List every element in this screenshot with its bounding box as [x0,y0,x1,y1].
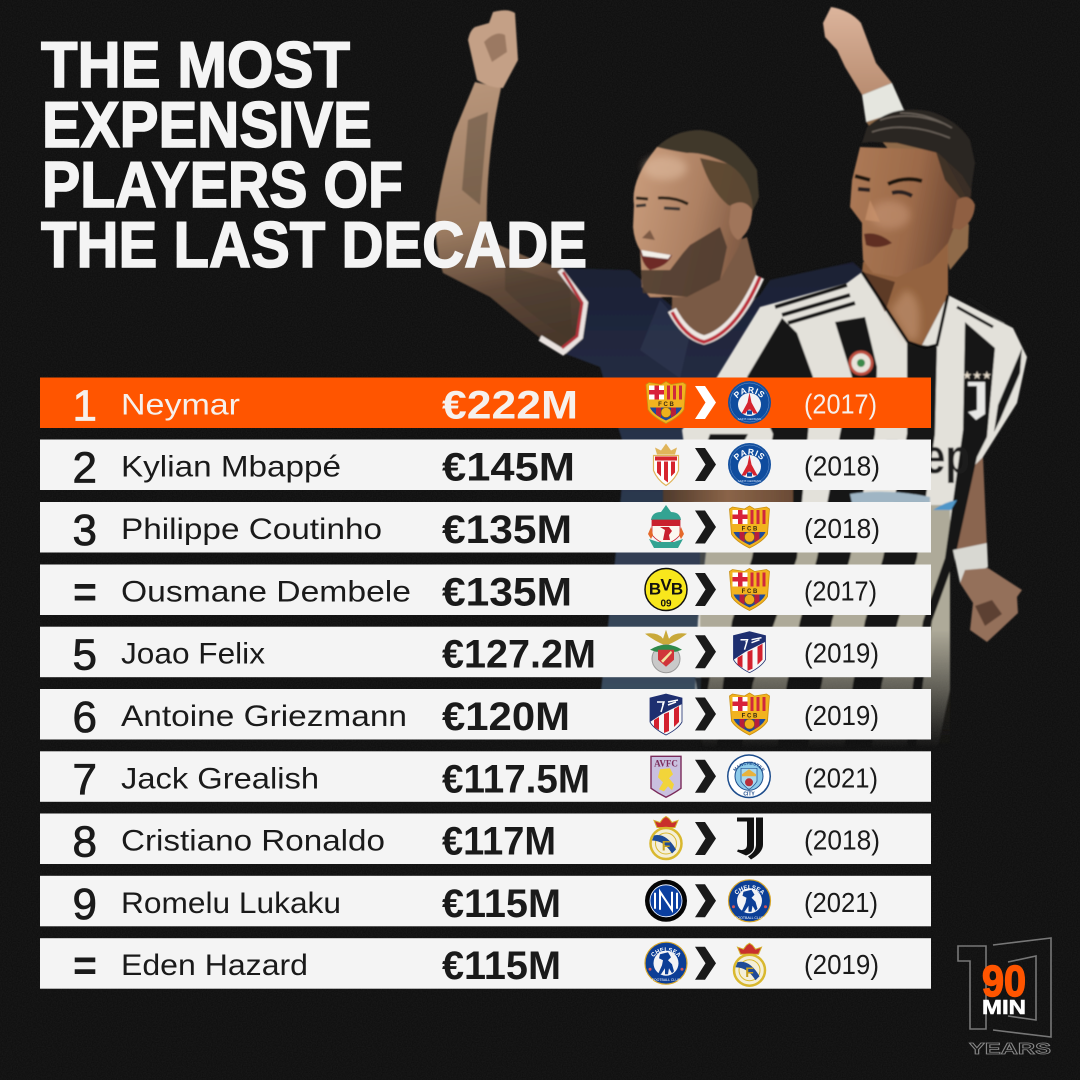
nose shadow [642,230,655,240]
crest: Dortmund: B [671,580,683,598]
row 6: Antoine Griezmann: (2019) [804,700,879,731]
title [41,28,587,281]
row 8: Cristiano Ronaldo: Cristiano Ronaldo [121,824,385,858]
row 4: Ousmane Dembele [40,564,931,616]
sponsor: Jeep [878,431,970,484]
jersey base [682,272,1027,760]
wristband lower [953,543,988,583]
crest: Inter [645,880,687,922]
jersey stripes [715,318,813,760]
hair [862,110,975,190]
row 2: Kylian Mbappé [40,440,931,492]
crest: Dortmund: V [660,576,672,594]
side fade hair [936,152,973,198]
row 3: Philippe Coutinho: Philippe Coutinho [121,513,382,546]
row 6: Antoine Griezmann: €120M [442,695,570,739]
row 3: Philippe Coutinho [40,502,931,555]
fist and forearm [823,7,892,95]
row 3: Philippe Coutinho: €135M [442,508,572,552]
cheek highlight [870,201,910,229]
sleeve trim [540,270,585,352]
neck [672,237,757,337]
row 9: Romelu Lukaku: €115M [442,882,561,926]
logo: 90min 10 years: MIN [982,997,1026,1019]
wristband [862,83,904,122]
ear [952,197,975,230]
crest: Benfica [645,630,687,673]
collar [672,277,760,340]
row 2: Kylian Mbappé: (2018) [804,450,880,482]
crest: Aston Villa: AVFC [654,758,678,768]
hand [960,568,1022,642]
row 10: Eden Hazard [40,938,931,990]
raised arm behind head [866,95,969,270]
row 3: Philippe Coutinho: (2018) [804,513,880,544]
row 1: Neymar: €222M [442,384,578,428]
crest: Monaco [654,444,678,486]
shoulder stripes [775,285,855,323]
row 7: Jack Grealish: Jack Grealish [121,762,319,795]
row 2: Kylian Mbappé: 2 [73,444,97,492]
row 6: Antoine Griezmann [40,689,931,742]
row 9: Romelu Lukaku: Romelu Lukaku [121,887,341,920]
crest: Aston Villa [651,756,681,797]
logo: 90min 10 years: YEARS [969,1041,1051,1058]
title: THE MOST [41,28,350,101]
forearm in gap [663,488,793,503]
row 8: Cristiano Ronaldo: 8 [73,818,97,866]
Italian badge [850,352,872,374]
head [850,147,965,277]
title: PLAYERS OF [42,148,403,221]
crest: Manchester City [727,754,771,798]
row 9: Romelu Lukaku: 9 [73,880,97,929]
row 8: Cristiano Ronaldo: €117M [442,820,556,864]
logo: 90min 10 years: 90 [982,957,1026,1006]
crest: Manchester City: CITY [743,791,755,797]
crest: Liverpool [648,505,684,548]
raised arm [436,82,585,352]
crest: Dortmund: 09 [660,598,672,610]
row 6: Antoine Griezmann: 6 [73,693,97,742]
row 4: Ousmane Dembele: (2017) [804,576,877,606]
title: EXPENSIVE [42,88,372,161]
row 7: Jack Grealish: €117.5M [442,757,590,801]
stars: ★★★ [962,370,992,382]
row 2: Kylian Mbappé: €145M [442,446,575,490]
forehead highlight [643,156,687,180]
row 1: Neymar: (2017) [804,388,877,420]
row 5: Joao Felix [40,627,931,680]
hair [657,130,759,210]
eyes and brows [636,198,688,204]
title: THE LAST DECADE [41,208,587,281]
fist [468,10,518,88]
mouth [864,233,892,247]
row 8: Cristiano Ronaldo [40,814,931,866]
crest: Dortmund [645,568,687,610]
beard [641,227,727,297]
row 8: Cristiano Ronaldo: (2018) [804,824,880,856]
row 10: Eden Hazard: = [73,941,97,990]
logo: 90min 10 years [958,938,1051,1058]
row 10: Eden Hazard: Eden Hazard [121,949,308,982]
row 7: Jack Grealish [40,751,931,804]
row 7: Jack Grealish: 7 [73,755,97,804]
row 1: Neymar [40,378,931,430]
row 5: Joao Felix: Joao Felix [121,638,265,671]
collar [862,272,948,348]
mouth [640,250,672,270]
row 5: Joao Felix: €127.2M [442,633,596,677]
row 1: Neymar: 1 [73,382,97,430]
row 9: Romelu Lukaku [40,876,931,929]
row 9: Romelu Lukaku: (2021) [804,887,878,918]
tattoo shading [462,112,572,340]
row 10: Eden Hazard: (2019) [804,949,879,980]
row 5: Joao Felix: (2019) [804,638,879,669]
jersey [562,262,864,700]
row 10: Eden Hazard: €115M [442,944,561,988]
ear [729,202,752,240]
row 5: Joao Felix: 5 [73,631,97,680]
row 4: Ousmane Dembele: Ousmane Dembele [121,576,411,608]
head [633,132,757,297]
crest: Manchester City: MANCHESTER [733,762,764,772]
crest: Dortmund: B [649,580,661,598]
eyes and brows [855,176,922,184]
J logo [968,382,985,420]
row 4: Ousmane Dembele: = [73,568,97,616]
row 3: Philippe Coutinho: 3 [73,506,97,555]
nose [865,200,880,222]
neck [862,243,948,345]
row 4: Ousmane Dembele: €135M [442,570,572,614]
crest: Juventus [737,818,763,860]
right arm [955,457,987,553]
lower jersey shade [700,505,950,760]
row 2: Kylian Mbappé: Kylian Mbappé [121,450,341,484]
row 6: Antoine Griezmann: Antoine Griezmann [121,700,407,733]
hair highlights [872,113,952,138]
row 7: Jack Grealish: (2021) [804,762,878,793]
photo: Neymar [436,10,864,700]
row 1: Neymar: Neymar [121,388,240,422]
side fade hair [700,158,758,212]
photo: Cristiano Ronaldo [663,7,1027,760]
